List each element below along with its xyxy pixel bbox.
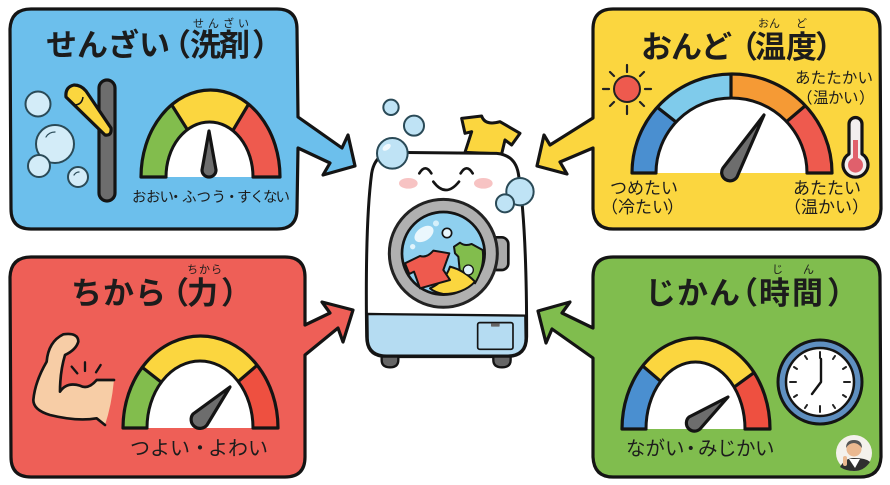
label: warm bottom kanji: （温かい） <box>784 198 869 217</box>
avatar: presenter <box>836 435 872 471</box>
ruby: time second: ん <box>803 263 814 276</box>
needle: time <box>686 397 728 431</box>
heading: detergent: せんざい（洗剤） <box>46 28 283 63</box>
panel shape with arrow: temperature <box>537 9 881 229</box>
icon: flexed arm <box>33 334 114 425</box>
bubbles around machine <box>377 100 534 212</box>
machine body <box>366 152 527 357</box>
icon: yellow shirt <box>462 116 520 154</box>
label: time scale: ながい・みじかい <box>626 438 775 460</box>
door handle <box>490 237 508 270</box>
door ring <box>389 199 497 307</box>
label: warm top kanji: （温かい） <box>797 89 875 107</box>
face <box>399 168 493 190</box>
needle: power <box>191 387 230 428</box>
panel: power <box>10 257 353 477</box>
label: cold kanji: （冷たい） <box>601 198 684 217</box>
icon: bubbles <box>26 92 88 187</box>
ruby: temperature: おん <box>758 17 780 30</box>
heading: power: ちから（力） <box>71 276 252 311</box>
icon: thermometer <box>843 118 868 177</box>
ruby: detergent: せんざい <box>193 16 249 30</box>
label: cold: つめたい <box>610 179 678 198</box>
needle: detergent <box>202 131 216 177</box>
heading: temperature: おんど（温度） <box>641 30 846 65</box>
panel: detergent <box>10 9 355 229</box>
illustration: washing machine <box>366 100 534 367</box>
feet <box>382 357 511 367</box>
ruby: time first: じ <box>772 263 783 276</box>
label: power scale: つよい・よわい <box>130 438 268 460</box>
needle: temperature <box>722 115 764 181</box>
door window with laundry <box>402 212 485 295</box>
label: warm top: あたたかい <box>795 69 873 87</box>
machine base panel <box>367 314 526 356</box>
icon: detergent lever <box>66 80 115 201</box>
panel shape with arrow: time <box>538 257 881 477</box>
gauge: power <box>121 334 280 430</box>
panel: time <box>538 257 881 477</box>
ruby: power: ちから <box>187 263 222 276</box>
label: warm bottom: あたたい <box>793 179 861 198</box>
gauge: time <box>620 336 772 433</box>
icon: sun <box>603 65 651 114</box>
ruby: temperature second part: ど <box>796 17 807 30</box>
panel shape with arrow: detergent <box>10 9 355 229</box>
label: detergent scale: おおい・ふつう・すくない <box>132 189 290 206</box>
panel: temperature <box>537 9 881 229</box>
gauge: detergent <box>139 88 282 179</box>
drawer <box>478 323 513 349</box>
panel shape with arrow: power <box>10 257 353 477</box>
heading: time: じかん（時間） <box>645 276 858 311</box>
gauge: temperature <box>630 72 834 182</box>
icon: clock <box>778 340 862 424</box>
